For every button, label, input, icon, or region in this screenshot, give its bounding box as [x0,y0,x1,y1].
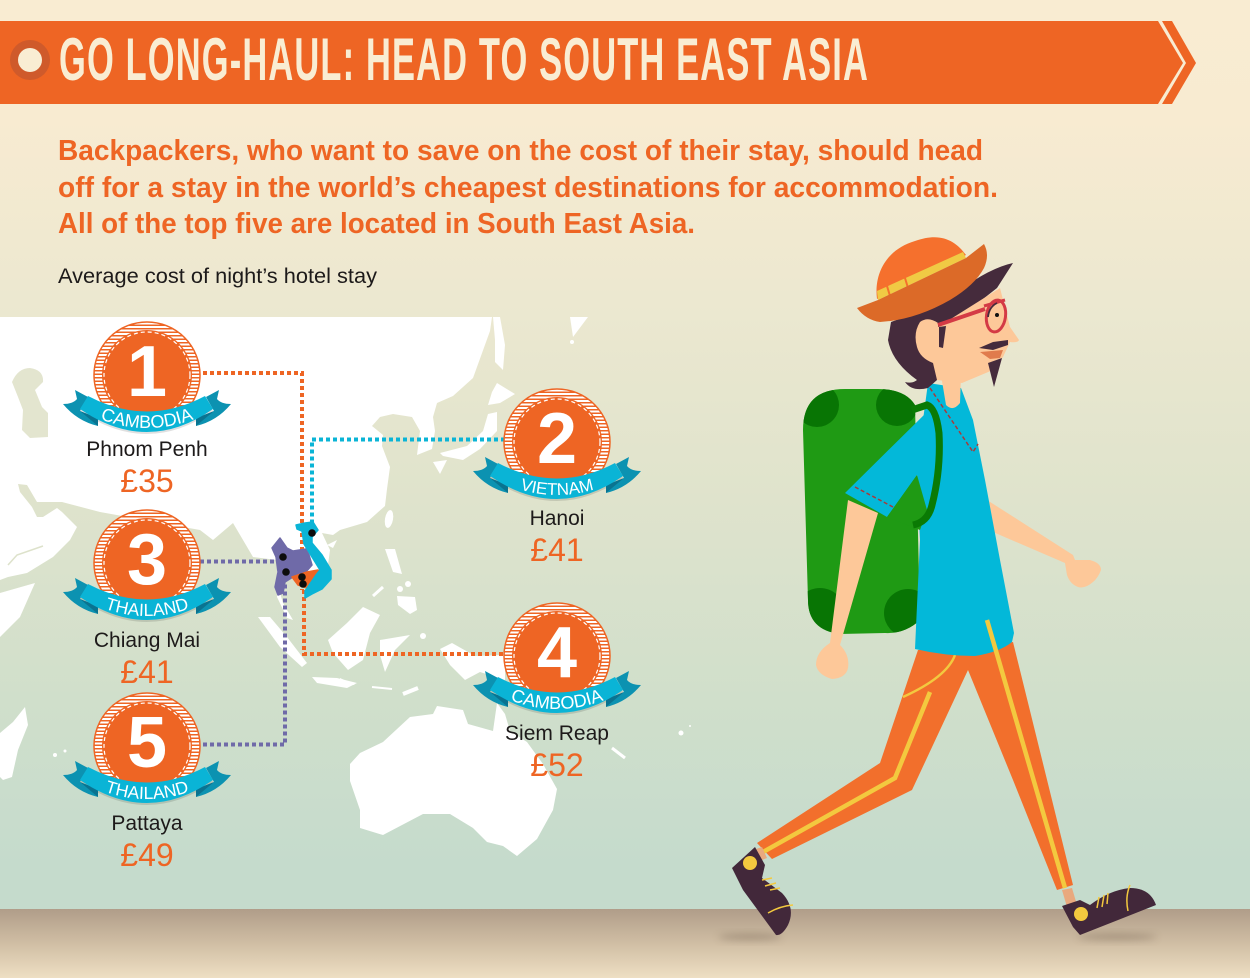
city: Siem Reap [505,722,609,783]
city: Chiang Mai [94,629,200,690]
subheading: Average cost of night’s hotel stay [58,265,378,288]
moustache and goatee [979,340,1008,387]
hat [857,237,987,322]
rear shoe [732,847,793,935]
city: Siem Reap: £52 [530,747,584,783]
trousers [757,642,1073,890]
eye [988,303,999,317]
header bullet icon [10,40,50,80]
badge 2: Vietnam: 2 [537,399,577,479]
city: Hanoi: Hanoi [530,507,584,530]
sideburn [939,326,946,348]
badge 3: Thailand: 3 [127,520,167,600]
sleeve [845,412,937,517]
city: Pattaya: Pattaya [111,812,183,835]
neck [941,375,961,408]
glasses [938,299,1008,333]
city: Phnom Penh [86,438,208,499]
face [916,288,1019,383]
intro text [58,135,998,240]
city: Hanoi: £41 [530,532,584,568]
hair [888,263,1013,389]
front arm [816,500,878,679]
city: Siem Reap: Siem Reap [505,722,609,745]
city: Pattaya: £49 [120,837,174,873]
shirt [915,383,1014,656]
backpack strap [912,405,939,525]
trouser stripe [987,620,1065,888]
badge 5: Thailand: 5 [127,703,167,783]
city: Chiang Mai: £41 [120,654,174,690]
ground [0,909,1250,978]
ankles [756,847,767,860]
collar stitching [930,388,978,452]
city: Pattaya [111,812,183,873]
world map [0,317,691,856]
badge 4: Cambodia: 4 [537,613,577,693]
city: Phnom Penh: Phnom Penh [86,438,208,461]
badge 2: Vietnam [473,388,641,501]
badge 5: Thailand [63,692,231,805]
badge 4: Cambodia [473,602,641,715]
badge 1: Cambodia [63,321,231,434]
intro text: off for a stay in the world’s cheapest destinations for accommodation. [58,172,998,204]
badge 3: Thailand: THAILAND [108,597,188,616]
badge 5: Thailand: THAILAND [108,780,188,799]
badge 1: Cambodia: CAMBODIA [102,409,194,428]
city: Phnom Penh: £35 [120,463,174,499]
city: Chiang Mai: Chiang Mai [94,629,200,652]
backpack [803,389,919,634]
intro text: Backpackers, who want to save on the cost of their stay, should head [58,135,983,167]
front shoe [1062,885,1156,935]
foot shadows [718,934,1157,940]
badge 1: Cambodia: 1 [127,332,167,412]
highlighted countries [272,522,331,598]
pack showing through sleeve notch [887,475,927,530]
intro text: All of the top five are located in South East Asia. [58,208,695,240]
badge 2: Vietnam: VIETNAM [522,478,593,495]
sleeve stitching [855,487,893,507]
rear arm [987,500,1101,587]
backpacker illustration [718,237,1157,940]
city: Hanoi [530,507,584,568]
badge 3: Thailand [63,509,231,622]
badge 4: Cambodia: CAMBODIA [512,690,604,709]
connector lines [200,373,505,744]
header banner [0,21,1196,104]
